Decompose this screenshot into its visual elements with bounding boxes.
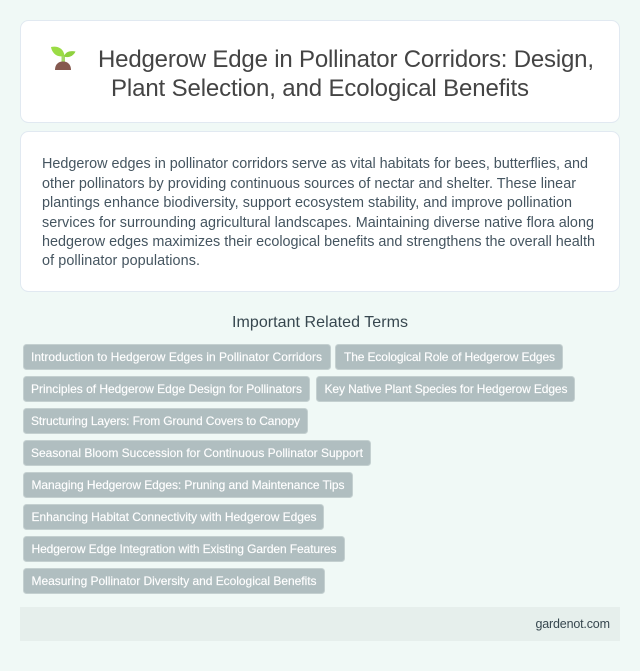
tag 8 — [24, 504, 324, 530]
text block: summary paragraph: other pollinators by providing continuous sources of nectar and shelter. These linear — [42, 176, 576, 192]
heading: related terms: Important Related Terms — [232, 314, 408, 331]
tag 3: Principles of Hedgerow Edge Design for Pollinators — [31, 382, 302, 396]
tag 8: Enhancing Habitat Connectivity with Hedgerow Edges — [32, 510, 316, 524]
tag 7 — [24, 472, 352, 498]
icon: seedling — [51, 47, 76, 70]
tag 9 — [24, 536, 344, 562]
tag 10: Measuring Pollinator Diversity and Ecological Benefits — [32, 574, 316, 588]
text block: summary paragraph — [42, 156, 595, 269]
tag 2 — [336, 344, 562, 370]
text block: summary paragraph: of pollinator populations. — [42, 253, 200, 269]
tag 6: Seasonal Bloom Succession for Continuous Pollinator Support — [31, 446, 364, 460]
title: Hedgerow Edge in Pollinator Corridors: Design, — [98, 46, 594, 73]
title — [98, 46, 594, 102]
footer — [20, 607, 620, 641]
tag 5: Structuring Layers: From Ground Covers to Canopy — [31, 414, 300, 428]
text block: summary paragraph: plantings enhance biodiversity, support ecosystem stability, and improve pollination — [42, 195, 572, 211]
tag 4: Key Native Plant Species for Hedgerow Edges — [324, 382, 568, 396]
tag 10 — [24, 568, 324, 594]
tag 7: Managing Hedgerow Edges: Pruning and Maintenance Tips — [32, 478, 344, 492]
tag 5 — [24, 408, 308, 434]
title: Plant Selection, and Ecological Benefits — [111, 75, 529, 102]
panel: summary card — [20, 132, 620, 292]
tag 1: Introduction to Hedgerow Edges in Pollinator Corridors — [31, 350, 322, 364]
tag 2: The Ecological Role of Hedgerow Edges — [344, 350, 555, 364]
text block: summary paragraph: services for surrounding agricultural landscapes. Maintaining diverse native flora along — [42, 215, 594, 231]
footer: gardenot.com — [536, 617, 610, 631]
tag 4 — [316, 376, 574, 402]
text block: summary paragraph: Hedgerow edges in pollinator corridors serve as vital habitats for bees, butterflies, and — [42, 156, 588, 172]
tag 1 — [24, 344, 330, 370]
panel: title card — [20, 20, 620, 122]
tag 3 — [24, 376, 310, 402]
panel: related term tags — [24, 344, 574, 594]
tag 6 — [24, 440, 370, 466]
tag 9: Hedgerow Edge Integration with Existing Garden Features — [32, 542, 336, 556]
text block: summary paragraph: hedgerow edges maximizes their ecological benefits and strengthens the overall health — [42, 234, 595, 250]
